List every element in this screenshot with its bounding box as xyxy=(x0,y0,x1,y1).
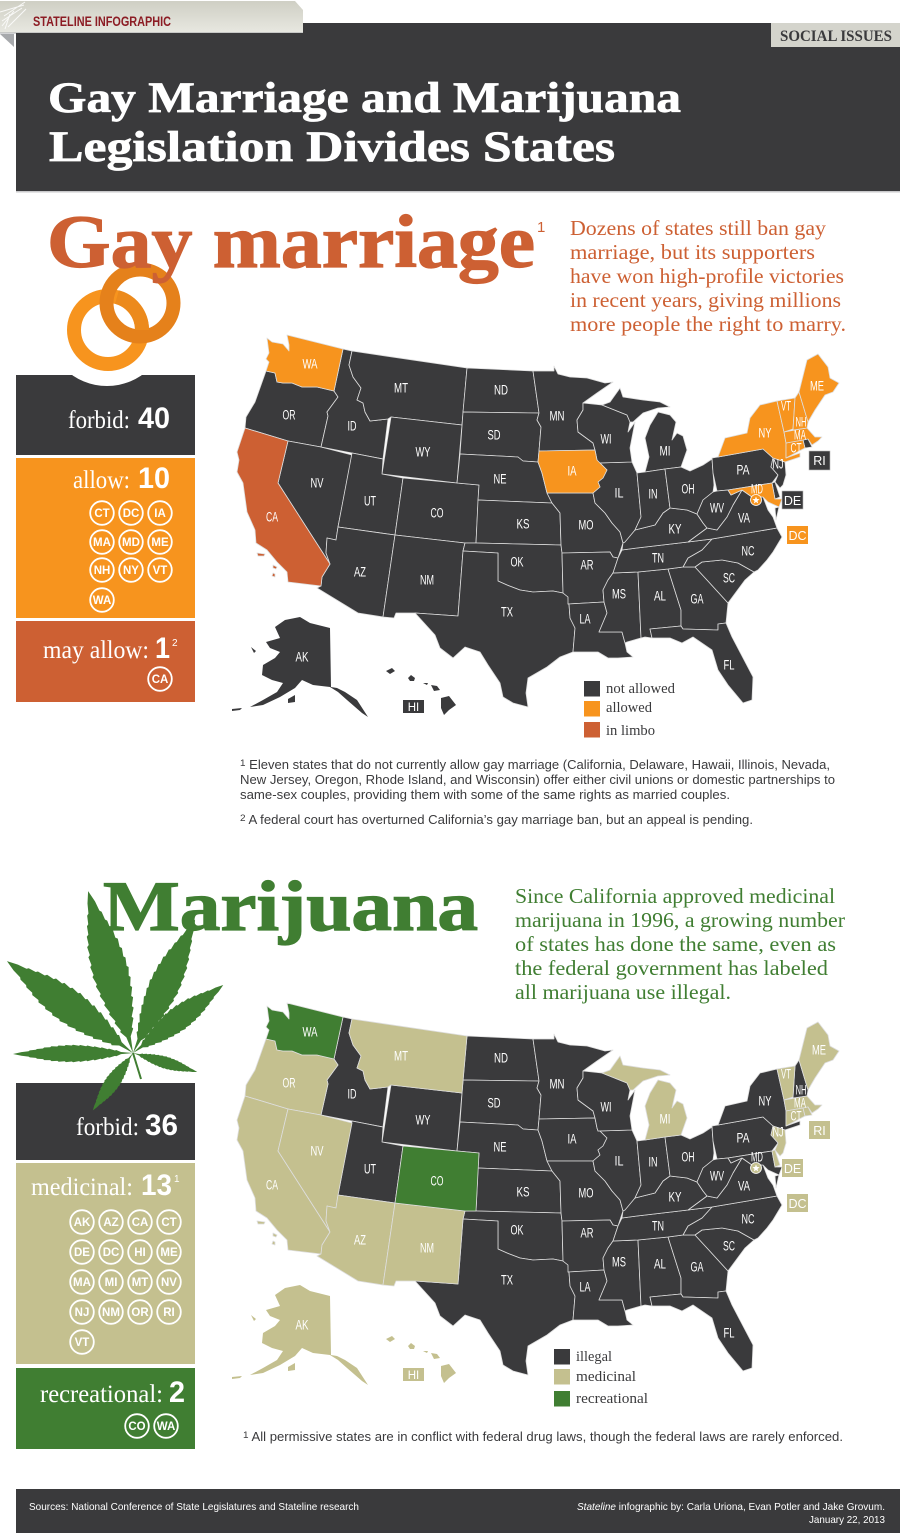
state labels: GA xyxy=(690,592,704,606)
text block: gay marriage intro: more people the right to marry. xyxy=(570,312,846,336)
panel: marijuana medicinal count and state badges: AK xyxy=(74,1217,91,1229)
footer: sources and credits: January 22, 2013 xyxy=(809,1514,885,1526)
state labels: KS xyxy=(516,1184,530,1200)
state labels: CA xyxy=(266,1178,278,1192)
panel: marijuana medicinal count and state badges: NJ xyxy=(75,1307,89,1319)
state labels: IL xyxy=(614,1154,624,1168)
panel: gay marriage forbid count xyxy=(16,264,195,455)
state labels: IA xyxy=(568,464,576,478)
header tab: Stateline infographic xyxy=(0,1,303,47)
state labels: VT xyxy=(781,1066,791,1082)
state labels: FL xyxy=(724,658,735,672)
heading: gay marriage: Gay marriage xyxy=(47,201,535,284)
state labels: IA xyxy=(568,1132,576,1146)
title banner xyxy=(16,23,900,192)
section tag: social issues: SOCIAL ISSUES xyxy=(780,28,892,45)
state labels: NV xyxy=(310,476,324,490)
state labels xyxy=(266,1024,826,1340)
panel: gay marriage may allow count: 1 xyxy=(155,632,170,665)
small state callout boxes: DE xyxy=(784,494,801,508)
state labels: NJ xyxy=(772,456,784,472)
state labels: CO xyxy=(430,1174,444,1188)
state labels: NY xyxy=(758,1094,772,1108)
footnotes: gay marriage: same-sex couples, providing them with some of the same rights as married couples. xyxy=(240,788,730,802)
footer: sources and credits xyxy=(16,1489,900,1533)
panel: marijuana recreational count xyxy=(16,1368,195,1449)
state labels: TX xyxy=(501,1272,513,1288)
state labels: NY xyxy=(758,426,772,440)
panel: marijuana medicinal count and state badges: VT xyxy=(75,1337,89,1349)
state labels: OR xyxy=(282,408,296,422)
legend: marijuana map: recreational xyxy=(576,1391,648,1407)
panel: marijuana forbid count: 36 xyxy=(145,1109,178,1142)
heading: marijuana: Marijuana xyxy=(103,868,478,946)
state labels: WY xyxy=(416,1112,430,1128)
text block: marijuana intro xyxy=(515,884,845,1004)
footnote: marijuana: 1 xyxy=(243,1430,249,1441)
panel: gay marriage allow count and state badges: MA xyxy=(93,537,111,549)
state labels: GA xyxy=(690,1260,704,1274)
state labels: VA xyxy=(738,1178,750,1194)
state labels: FL xyxy=(724,1326,735,1340)
state labels: OH xyxy=(682,1150,694,1164)
text block: marijuana intro: of states has done the same, even as xyxy=(515,932,836,956)
state labels: IL xyxy=(614,486,624,500)
state labels: PA xyxy=(736,462,750,478)
state labels: IN xyxy=(648,486,658,502)
footer: sources and credits: Sources: National Conference of State Legislatures and Stateline research xyxy=(29,1501,359,1513)
state labels: UT xyxy=(364,494,376,508)
state labels: ID xyxy=(348,1086,357,1102)
state labels: CT xyxy=(790,440,802,456)
panel: marijuana medicinal count and state badges: AZ xyxy=(103,1217,119,1229)
panel: marijuana recreational count: CO xyxy=(128,1421,146,1433)
state labels: ND xyxy=(494,1050,508,1066)
state labels: NH xyxy=(796,1082,806,1098)
state labels: AK xyxy=(296,650,308,664)
panel: marijuana forbid count xyxy=(16,1083,195,1160)
panel: gay marriage allow count and state badges: NH xyxy=(94,565,110,577)
panel: marijuana recreational count: WA xyxy=(157,1421,175,1433)
legend: gay marriage map: allowed xyxy=(606,700,653,716)
state labels: MD xyxy=(751,1150,763,1164)
footnotes: gay marriage: 1 xyxy=(240,758,246,769)
panel: gay marriage allow count and state badges: 10 xyxy=(138,462,170,495)
state labels: NJ xyxy=(772,1124,784,1140)
state labels: VT xyxy=(781,398,791,414)
text block: gay marriage intro xyxy=(570,216,846,336)
state labels: OH xyxy=(682,482,694,496)
small state callout boxes: RI xyxy=(813,454,826,468)
small state callout boxes: HI xyxy=(408,1370,419,1382)
footnotes: gay marriage xyxy=(240,758,835,827)
panel: marijuana medicinal count and state badges: OR xyxy=(131,1307,149,1319)
panel: gay marriage forbid count: forbid: xyxy=(68,407,130,434)
state labels: AZ xyxy=(354,564,366,580)
state labels: AR xyxy=(580,1226,594,1240)
state labels: NE xyxy=(494,1140,506,1154)
footnotes: gay marriage: New Jersey, Oregon, Rhode Island, and Wisconsin) offer either civil unions or domestic partnerships to xyxy=(240,773,835,787)
map: marijuana status by state xyxy=(232,1003,839,1385)
state labels: KY xyxy=(668,1190,682,1204)
state labels: CO xyxy=(430,506,444,520)
panel: gay marriage allow count and state badges: DC xyxy=(123,508,139,520)
panel: gay marriage allow count and state badges: NY xyxy=(123,565,139,577)
panel: marijuana medicinal count and state badges xyxy=(16,1163,195,1364)
state labels: ME xyxy=(810,378,824,394)
legend: gay marriage map: not allowed xyxy=(606,681,676,697)
state labels: NM xyxy=(420,572,434,588)
state labels: WV xyxy=(710,500,724,516)
state labels: AL xyxy=(654,588,666,604)
state labels: ID xyxy=(348,418,357,434)
small state callout boxes: RI xyxy=(813,1124,826,1138)
map: gay marriage status by state xyxy=(232,335,839,717)
state labels: MI xyxy=(660,1112,670,1126)
footer: sources and credits: Stateline infographic by: Carla Uriona, Evan Potler and Jake Grovum. xyxy=(577,1501,885,1513)
title banner: Legislation Divides States xyxy=(49,124,615,171)
panel: marijuana medicinal count and state badges: CA xyxy=(132,1217,148,1229)
state labels: LA xyxy=(580,1280,590,1294)
state labels: CT xyxy=(790,1108,802,1124)
state labels: WI xyxy=(600,1100,612,1114)
text block: gay marriage intro: Dozens of states still ban gay xyxy=(570,216,826,240)
state labels: WY xyxy=(416,444,430,460)
text block: marijuana intro: the federal government has labeled xyxy=(515,956,828,980)
panel: marijuana medicinal count and state badges: 1 xyxy=(174,1174,180,1185)
footnotes: gay marriage: 2 xyxy=(240,813,246,824)
state labels: OK xyxy=(510,1222,524,1238)
state labels: MO xyxy=(578,518,594,532)
icon: marijuana leaf xyxy=(0,886,231,1115)
state labels: TN xyxy=(652,1218,664,1234)
state labels: TN xyxy=(652,550,664,566)
panel: marijuana medicinal count and state badges: MI xyxy=(105,1277,117,1289)
panel: marijuana forbid count: forbid: xyxy=(76,1114,139,1141)
panel: gay marriage allow count and state badges: IA xyxy=(154,508,166,520)
panel: marijuana recreational count: recreational: xyxy=(40,1381,163,1408)
panel: gay marriage allow count and state badges: MD xyxy=(122,537,140,549)
panel: marijuana medicinal count and state badges: MA xyxy=(73,1277,91,1289)
state labels: OK xyxy=(510,554,524,570)
text block: gay marriage intro: in recent years, giving millions xyxy=(570,288,841,312)
panel: gay marriage may allow count xyxy=(16,621,195,702)
text block: marijuana intro: all marijuana use illegal. xyxy=(515,980,731,1004)
state labels: MA xyxy=(794,1096,806,1110)
state labels: NM xyxy=(420,1240,434,1256)
state labels: WA xyxy=(302,1024,318,1040)
state shapes xyxy=(232,335,839,717)
state labels: LA xyxy=(580,612,590,626)
state labels: SC xyxy=(723,1238,735,1254)
state labels: MT xyxy=(394,380,408,396)
text block: gay marriage intro: have won high-profile victories xyxy=(570,264,844,288)
panel: marijuana medicinal count and state badges: CT xyxy=(161,1217,177,1229)
panel: marijuana recreational count: 2 xyxy=(169,1376,185,1409)
small state callout boxes: HI xyxy=(408,702,419,714)
state labels: SD xyxy=(488,1096,501,1110)
text block: gay marriage intro: marriage, but its supporters xyxy=(570,240,815,264)
state labels: IN xyxy=(648,1154,658,1170)
panel: gay marriage may allow count: may allow: xyxy=(43,637,149,664)
text block: marijuana intro: marijuana in 1996, a growing number xyxy=(515,908,845,932)
state labels: KY xyxy=(668,522,682,536)
panel: marijuana medicinal count and state badges: RI xyxy=(163,1307,175,1319)
panel: gay marriage allow count and state badges: VT xyxy=(153,565,167,577)
panel: gay marriage allow count and state badges: ME xyxy=(151,537,169,549)
text block: marijuana intro: Since California approved medicinal xyxy=(515,884,835,908)
small state callout boxes: DC xyxy=(788,1197,807,1211)
panel: marijuana medicinal count and state badges: ME xyxy=(160,1247,178,1259)
state labels: ND xyxy=(494,382,508,398)
title banner: Gay Marriage and Marijuana xyxy=(48,75,681,122)
legend: marijuana map: illegal xyxy=(576,1349,612,1365)
state labels xyxy=(266,356,824,672)
section tag: social issues xyxy=(771,23,900,47)
state labels: MO xyxy=(578,1186,594,1200)
panel: marijuana medicinal count and state badges: DC xyxy=(103,1247,119,1259)
state labels: SC xyxy=(723,570,735,586)
state labels: WV xyxy=(710,1168,724,1184)
legend: marijuana map: medicinal xyxy=(576,1369,636,1385)
state labels: NC xyxy=(742,544,755,558)
panel: marijuana medicinal count and state badges: medicinal: xyxy=(31,1174,133,1201)
small state callout boxes: DE xyxy=(784,1162,801,1176)
panel: gay marriage allow count and state badges: WA xyxy=(93,595,111,607)
legend: gay marriage map: in limbo xyxy=(606,723,655,739)
panel: gay marriage allow count and state badges: allow: xyxy=(73,467,130,494)
heading: gay marriage: 1 xyxy=(537,219,545,236)
small state callout boxes xyxy=(403,451,830,714)
state labels: VA xyxy=(738,510,750,526)
state labels: NE xyxy=(494,472,506,486)
header tab: Stateline infographic: STATELINE INFOGRAPHIC xyxy=(33,14,171,29)
state labels: ME xyxy=(812,1042,826,1058)
state shapes xyxy=(232,1003,839,1385)
panel: gay marriage may allow count: 2 xyxy=(172,638,178,649)
state labels: MN xyxy=(550,1076,564,1092)
panel: marijuana medicinal count and state badges: NV xyxy=(161,1277,177,1289)
state labels: AK xyxy=(296,1318,308,1332)
panel: marijuana medicinal count and state badges: MT xyxy=(132,1277,148,1289)
state labels: UT xyxy=(364,1162,376,1176)
small state callout boxes: DC xyxy=(788,529,807,543)
state labels: WA xyxy=(302,356,318,372)
state labels: AL xyxy=(654,1256,666,1272)
panel: gay marriage allow count and state badges xyxy=(16,458,195,618)
state labels: MD xyxy=(751,482,763,496)
state labels: SD xyxy=(488,428,501,442)
panel: gay marriage allow count and state badges: CT xyxy=(94,508,110,520)
state labels: MT xyxy=(394,1048,408,1064)
state labels: PA xyxy=(736,1130,750,1146)
panel: gay marriage forbid count: 40 xyxy=(138,402,170,435)
state labels: OR xyxy=(282,1076,296,1090)
icon: interlocked wedding rings xyxy=(74,270,174,364)
panel: marijuana medicinal count and state badges: NM xyxy=(102,1307,120,1319)
legend: marijuana map xyxy=(554,1349,648,1407)
state labels: MS xyxy=(612,586,626,602)
state labels: CA xyxy=(266,510,278,524)
small state callout boxes xyxy=(403,1121,830,1382)
footnotes: gay marriage: A federal court has overturned California’s gay marriage ban, but an appeal is pending. xyxy=(246,813,753,827)
panel: marijuana medicinal count and state badges: DE xyxy=(74,1247,90,1259)
state labels: MN xyxy=(550,408,564,424)
state labels: AZ xyxy=(354,1232,366,1248)
state labels: TX xyxy=(501,604,513,620)
footnote: marijuana: All permissive states are in conflict with federal drug laws, though the federal laws are rarely enforced. xyxy=(249,1430,843,1444)
state labels: NH xyxy=(796,414,806,430)
footnotes: gay marriage: Eleven states that do not currently allow gay marriage (California, Delaware, Hawaii, Illinois, Nevada, xyxy=(246,758,830,772)
state labels: AR xyxy=(580,558,594,572)
state labels: WI xyxy=(600,432,612,446)
state labels: MS xyxy=(612,1254,626,1270)
state labels: NV xyxy=(310,1144,324,1158)
state labels: KS xyxy=(516,516,530,532)
state labels: MA xyxy=(794,428,806,442)
panel: marijuana medicinal count and state badges: HI xyxy=(134,1247,146,1259)
state labels: NC xyxy=(742,1212,755,1226)
state labels: MI xyxy=(660,444,670,458)
panel: gay marriage may allow count: CA xyxy=(152,674,168,686)
panel: marijuana medicinal count and state badges: 13 xyxy=(141,1169,172,1202)
legend: gay marriage map xyxy=(584,681,676,739)
